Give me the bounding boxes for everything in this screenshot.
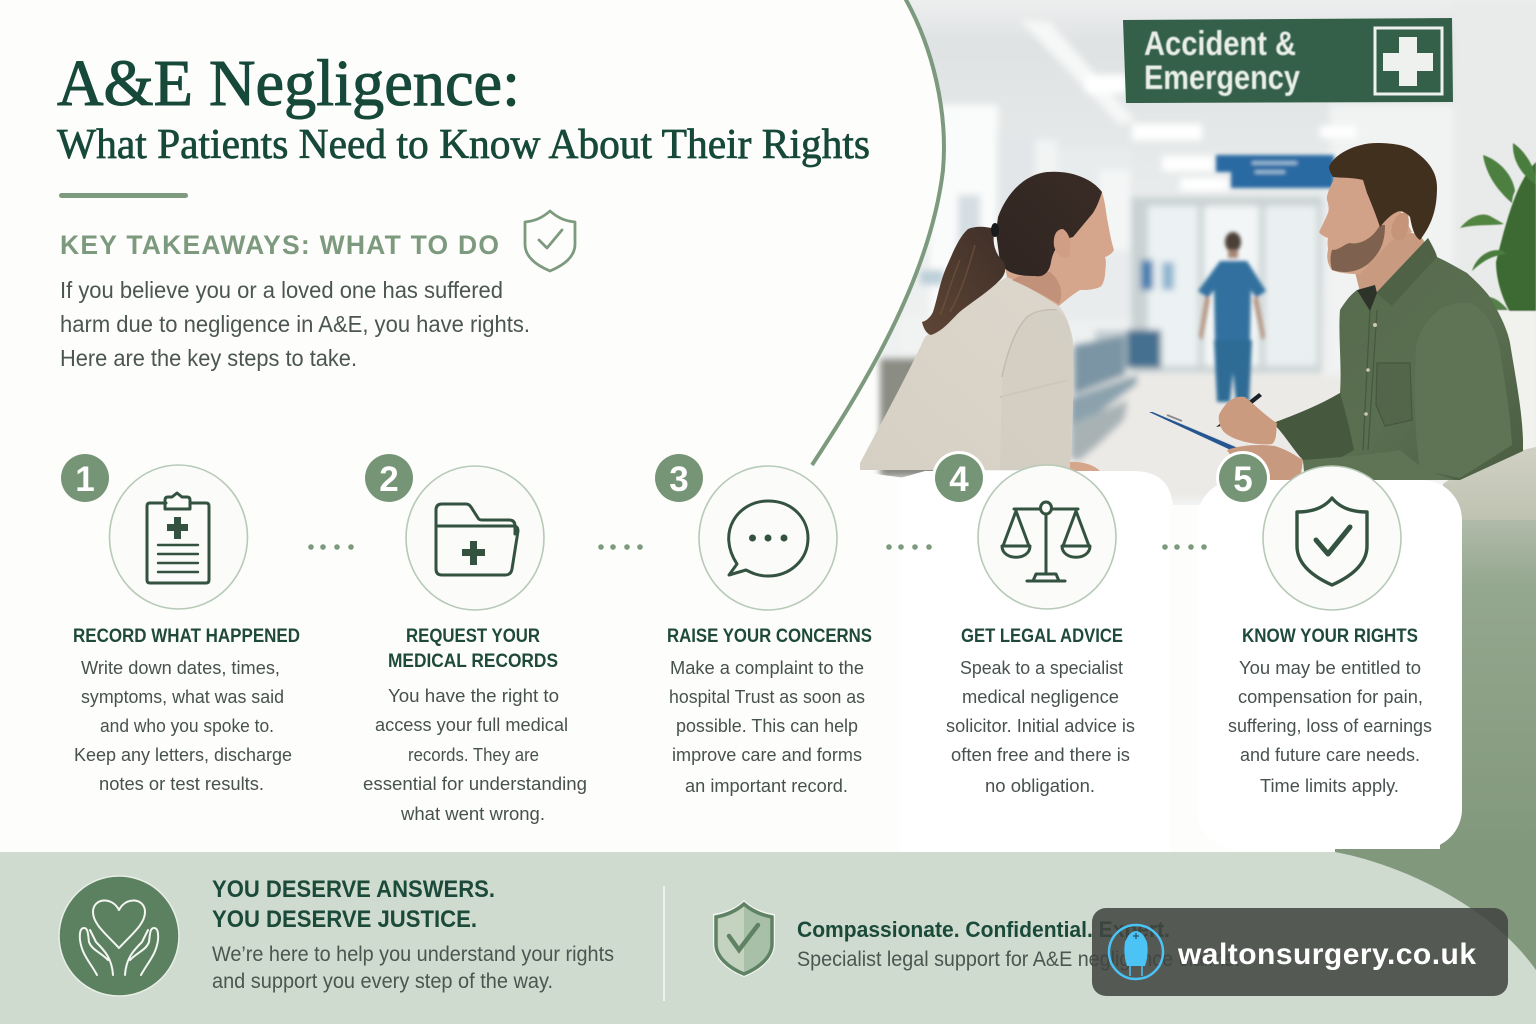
chair arm xyxy=(1443,447,1536,567)
writing hand xyxy=(1219,397,1277,444)
band divider xyxy=(663,886,665,1001)
description: symptoms, what was said xyxy=(81,686,284,707)
ear xyxy=(1054,229,1070,258)
badge 1 xyxy=(61,454,109,502)
step 3: raise your concerns xyxy=(655,454,872,796)
step 1: record what happened xyxy=(61,454,300,794)
sign: Accident & Emergency: Emergency xyxy=(1144,59,1300,97)
description: Keep any letters, discharge xyxy=(74,744,292,765)
green panel right of cards xyxy=(1300,520,1536,1000)
description xyxy=(74,657,292,794)
badge 2 xyxy=(365,454,413,502)
callout: you deserve answers xyxy=(212,876,614,993)
placket and pocket xyxy=(1363,310,1377,450)
description: compensation for pain, xyxy=(1238,686,1423,707)
icon: clipboard xyxy=(110,465,248,609)
icon: shield check outline xyxy=(525,211,575,271)
heading: REQUEST YOUR xyxy=(406,626,540,647)
icon: green shield xyxy=(713,900,775,977)
heading: RECORD WHAT HAPPENED xyxy=(73,626,300,647)
description: and who you spoke to. xyxy=(100,715,274,736)
plant xyxy=(1460,143,1536,471)
intro text: harm due to negligence in A&E, you have rights. xyxy=(60,311,530,337)
icon: shield with check xyxy=(1263,466,1401,610)
sign: Accident & Emergency xyxy=(1123,18,1453,103)
clipboard xyxy=(1149,411,1240,452)
icon: heart in hands xyxy=(59,876,179,996)
description: You have the right to xyxy=(388,685,559,706)
description xyxy=(363,685,587,824)
intro text: If you believe you or a loved one has suffered xyxy=(60,277,503,303)
light gap between cards xyxy=(1170,505,1335,852)
title rule xyxy=(59,193,188,198)
heading: RAISE YOUR CONCERNS xyxy=(667,626,872,647)
callout: you deserve answers: We’re here to help you understand your rights xyxy=(212,943,614,966)
step 4: get legal advice xyxy=(932,451,1135,796)
description: Time limits apply. xyxy=(1260,775,1399,796)
heading line 2: What Patients Need to Know About Their Rights xyxy=(57,122,870,168)
description: hospital Trust as soon as xyxy=(669,686,865,707)
callout: compassionate confidential expert: Specialist legal support for A&E negligence claims. xyxy=(797,948,1240,971)
woman xyxy=(860,172,1114,472)
badge 5 xyxy=(1216,451,1270,505)
watermark badge: waltonsurgery.co.uk xyxy=(1177,938,1476,971)
callout: you deserve answers: YOU DESERVE ANSWERS. xyxy=(212,876,495,903)
curved green border xyxy=(812,0,944,465)
heading xyxy=(388,626,558,672)
description: Make a complaint to the xyxy=(670,657,864,678)
woman's hand xyxy=(1070,462,1101,472)
intro text: Here are the key steps to take. xyxy=(60,345,357,371)
description: You may be entitled to xyxy=(1239,657,1421,678)
collar xyxy=(1376,238,1437,306)
description: often free and there is xyxy=(951,744,1130,765)
description: essential for understanding xyxy=(363,773,587,794)
sign: Accident & Emergency: Accident & xyxy=(1144,25,1296,63)
description xyxy=(1228,657,1432,796)
shirt sleeve and seams xyxy=(1415,303,1512,478)
heading: KNOW YOUR RIGHTS xyxy=(1242,626,1418,647)
heading: MEDICAL RECORDS xyxy=(388,651,558,672)
description: an important record. xyxy=(685,775,848,796)
blue directional sign xyxy=(1216,155,1334,188)
ear xyxy=(1391,212,1409,241)
beard xyxy=(1330,225,1385,272)
icon: scales xyxy=(978,465,1116,609)
description: and future care needs. xyxy=(1240,744,1420,765)
description xyxy=(669,657,865,796)
supporting hand xyxy=(1227,445,1303,480)
description: Write down dates, times, xyxy=(81,657,280,678)
description: records. They are xyxy=(408,744,539,765)
hair xyxy=(1329,143,1437,240)
face and neck xyxy=(1000,192,1114,306)
description: possible. This can help xyxy=(676,715,858,736)
description: suffering, loss of earnings xyxy=(1228,715,1432,736)
buttons xyxy=(1364,323,1377,416)
icon: nurse logo xyxy=(1109,925,1163,979)
hair tie xyxy=(991,223,999,237)
description: Speak to a specialist xyxy=(960,657,1123,678)
face xyxy=(1319,177,1412,274)
badge 4: 4 xyxy=(949,460,969,499)
callout: you deserve answers: and support you every step of the way. xyxy=(212,970,553,993)
description: access your full medical xyxy=(375,714,568,735)
description: what went wrong. xyxy=(400,803,545,824)
description: notes or test results. xyxy=(99,773,264,794)
icon: folder xyxy=(406,466,544,610)
badge 2: 2 xyxy=(379,460,399,499)
sweater xyxy=(860,277,1073,470)
badge 5: 5 xyxy=(1233,460,1253,499)
description: medical negligence xyxy=(962,686,1119,707)
neck xyxy=(1355,225,1430,296)
callout: you deserve answers: YOU DESERVE JUSTICE. xyxy=(212,906,477,933)
ponytail xyxy=(922,227,1005,335)
description: improve care and forms xyxy=(672,744,862,765)
corridor background xyxy=(880,0,1536,510)
description: no obligation. xyxy=(985,775,1095,796)
pen xyxy=(1216,393,1262,427)
title xyxy=(57,47,870,168)
nurse walking away xyxy=(1198,232,1266,402)
card 5 background xyxy=(1197,480,1462,849)
white left panel with curved edge xyxy=(0,0,944,860)
callout: compassionate confidential expert: Compassionate. Confidential. Expert. xyxy=(797,917,1170,942)
key takeaways heading: KEY TAKEAWAYS: WHAT TO DO xyxy=(60,230,499,260)
heading: GET LEGAL ADVICE xyxy=(961,626,1123,647)
connector dots xyxy=(308,544,1207,550)
description: solicitor. Initial advice is xyxy=(946,715,1135,736)
man xyxy=(1149,143,1523,480)
green gradient upper area xyxy=(1440,520,1536,850)
icon: speech bubble xyxy=(699,466,837,610)
card 4 background xyxy=(900,471,1173,852)
description xyxy=(946,657,1135,796)
badge 3: 3 xyxy=(669,460,689,499)
badge 3 xyxy=(655,454,703,502)
heading line 1: A&E Negligence: xyxy=(57,47,520,120)
hair xyxy=(996,172,1102,276)
plant pot xyxy=(1497,311,1536,471)
photo: hospital corridor with patient and solicitor xyxy=(860,0,1536,567)
badge 4 xyxy=(932,451,986,505)
watermark badge xyxy=(1092,908,1508,996)
bottom band xyxy=(0,852,1536,1024)
step 2: request your medical records xyxy=(363,454,587,824)
callout: compassionate confidential expert xyxy=(797,917,1240,971)
badge 1: 1 xyxy=(75,460,95,499)
intro text xyxy=(60,277,530,371)
step 5: know your rights xyxy=(1216,451,1432,796)
shirt body xyxy=(1273,238,1523,480)
